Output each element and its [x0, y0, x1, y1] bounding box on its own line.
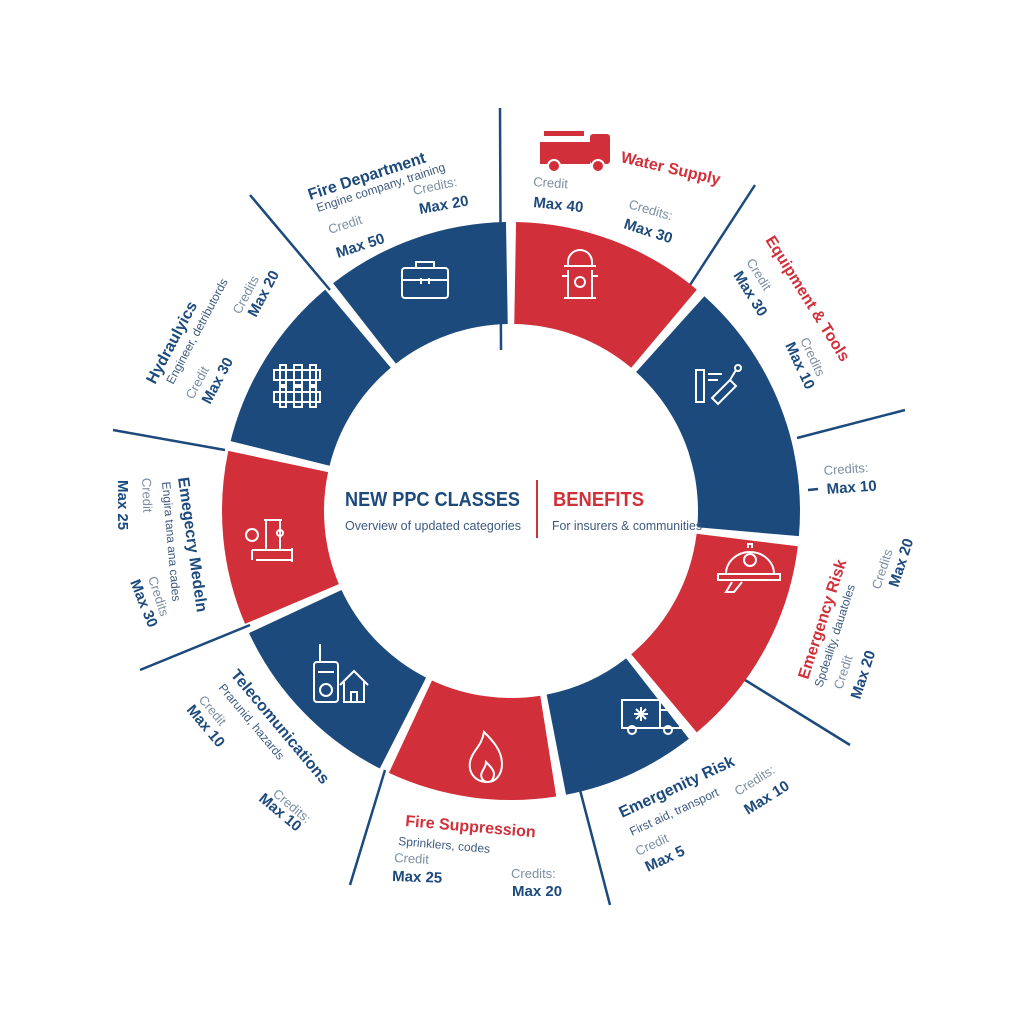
label: hydraulics: Credit: [182, 363, 212, 401]
label: emergency medeln: Credit: [139, 478, 155, 513]
icon: helmet: [718, 544, 780, 592]
label: emergency medeln: [114, 476, 210, 630]
icon: toolbox: [402, 262, 448, 298]
label: emergency medeln: Emegecry Medeln: [174, 476, 210, 613]
label: hydraulics: Max 20: [245, 268, 283, 320]
label: water supply: Credit: [533, 174, 569, 191]
label: equipment & tools: Max 30: [730, 268, 771, 320]
label: equipment & tools: Max 10: [781, 340, 818, 392]
label: emergenity risk bottom: Max 5: [643, 843, 687, 876]
label: fire suppression: Max 20: [512, 883, 562, 900]
icon: flame: [470, 732, 502, 782]
label: fire department: Credits:: [412, 174, 458, 198]
center title block: [345, 480, 702, 538]
label: emergency medeln: Max 30: [126, 577, 161, 630]
label: fire department: Max 50: [334, 230, 387, 262]
center title block: BENEFITS: [553, 489, 644, 511]
label: hydraulics: Max 30: [199, 355, 237, 407]
label: emergency risk right: Credits: [869, 547, 896, 591]
label: emergency risk right: Emergency Risk: [796, 557, 850, 681]
label: equipment & tools: Equipment & Tools: [762, 233, 853, 365]
label: emergenity risk bottom: Credits:: [732, 762, 778, 799]
label: emergenity risk bottom: Max 10: [741, 777, 793, 818]
label: fire department: Credit: [326, 212, 364, 237]
label: small segment credits: Max 10: [826, 478, 877, 498]
icon: hydrant: [562, 250, 598, 298]
icons: [246, 250, 780, 782]
label: emergency risk right: Max 20: [886, 536, 917, 589]
label: equipment & tools: Credit: [743, 256, 775, 293]
label: emergency medeln: Max 25: [114, 480, 131, 530]
label: water supply: [533, 149, 722, 247]
label: water supply: Credits:: [627, 196, 674, 223]
label: fire suppression: Max 25: [392, 868, 442, 887]
label: telecommunications: Prarunid, hazards: [216, 681, 287, 762]
radial divider lines: [113, 108, 905, 905]
label: hydraulics: Credits: [229, 273, 262, 316]
label: water supply: Water Supply: [619, 149, 722, 189]
center title block: NEW PPC CLASSES: [345, 489, 520, 511]
label: emergency risk right: Spdeality, dauatoles: [812, 583, 858, 689]
label: fire suppression: Credit: [394, 850, 430, 867]
label: telecommunications: [183, 667, 332, 835]
icon: radio and house: [314, 644, 368, 702]
icon: ambulance: [622, 700, 680, 734]
label: telecommunications: Max 10: [183, 702, 228, 751]
label: telecommunications: Credits:: [270, 786, 314, 826]
label: fire suppression: Credits:: [511, 866, 556, 881]
icon: fire truck: [540, 131, 610, 172]
label: emergenity risk bottom: [617, 753, 793, 876]
label: emergenity risk bottom: Credit: [633, 830, 671, 859]
label: small segment credits: [823, 460, 877, 498]
ring segments: [175, 175, 847, 847]
label: fire suppression: [392, 813, 562, 900]
label: hydraulics: Engineer, detributords: [163, 276, 231, 386]
label: hydraulics: Hydraulyics: [144, 299, 201, 387]
label: fire department: Engine company, training: [315, 160, 447, 215]
label: hydraulics: [144, 268, 283, 407]
label: emergency risk right: Max 20: [848, 648, 879, 701]
icon: pipes: [274, 365, 320, 407]
icon: pump: [246, 520, 292, 562]
label: equipment & tools: Credits: [797, 335, 828, 379]
label: emergenity risk bottom: Emergenity Risk: [617, 753, 737, 822]
label: fire suppression: Sprinklers, codes: [398, 834, 491, 856]
label: telecommunications: Credit: [196, 692, 230, 729]
label: emergency medeln: Engira tana ana cades: [159, 481, 183, 602]
label: telecommunications: Telecomunications: [227, 667, 332, 788]
label: small segment credits: Credits:: [823, 460, 869, 478]
label: water supply: Max 40: [533, 194, 584, 216]
label: telecommunications: Max 10: [255, 790, 305, 835]
label: fire department: Fire Department: [306, 150, 429, 204]
label: emergency risk right: Credit: [831, 653, 856, 691]
label: water supply: Max 30: [622, 216, 675, 247]
center title block: For insurers & communities: [552, 519, 702, 533]
label: emergency risk right: [796, 536, 917, 701]
center title block: Overview of updated categories: [345, 519, 521, 533]
label: emergency medeln: Credits: [145, 574, 172, 619]
label: emergenity risk bottom: First aid, transport: [627, 785, 722, 839]
label: fire suppression: Fire Suppression: [405, 813, 536, 841]
label: equipment & tools: [730, 233, 853, 392]
label: fire department: Max 20: [418, 193, 470, 218]
label: fire department: [306, 150, 470, 262]
icon: tools: [696, 365, 741, 404]
